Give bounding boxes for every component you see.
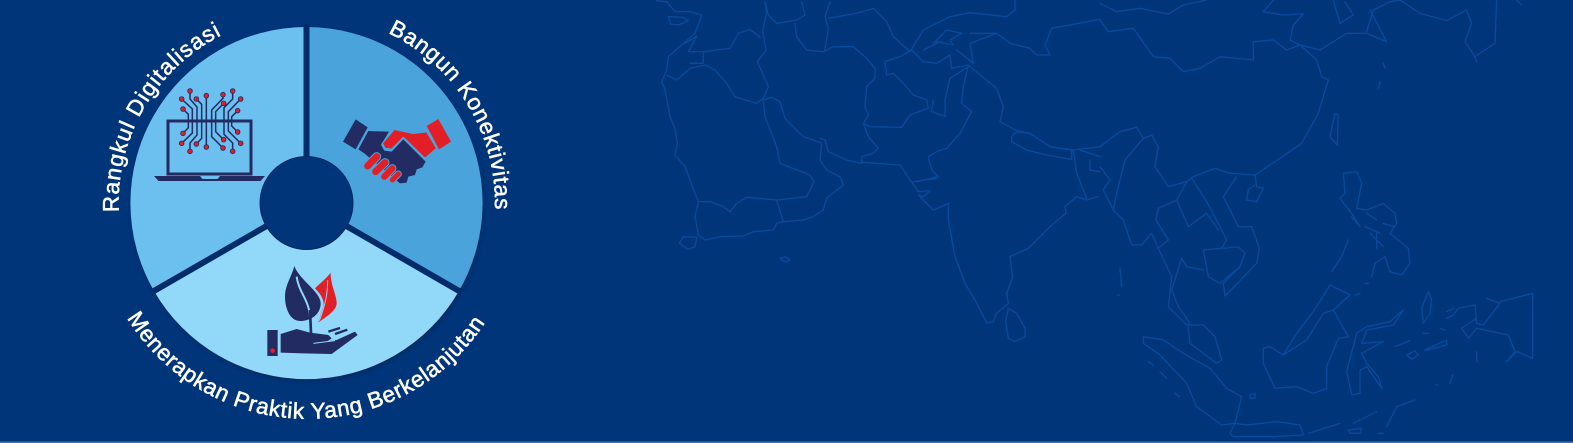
wheel base with shadow — [130, 27, 482, 379]
label: Menerapkan Praktik Yang Berkelanjutan: Menerapkan Praktik Yang Berkelanjutan — [128, 310, 485, 420]
icon: plant in hand — [267, 266, 358, 356]
circuit — [179, 89, 243, 154]
center hole — [260, 156, 353, 250]
dividers — [153, 24, 460, 292]
map outline: East and Southeast Asia — [1100, 0, 1533, 437]
laptop screen — [168, 121, 251, 174]
icon: handshake — [343, 119, 451, 183]
bottom edge line — [0, 442, 1573, 443]
pie wheel — [130, 24, 483, 379]
map outline: western Asia and South Asia — [657, 0, 1100, 342]
laptop base — [154, 176, 265, 181]
label: Rangkul Digitalisasi: Rangkul Digitalisasi — [102, 21, 221, 211]
segment: Rangkul Digitalisasi — [130, 27, 306, 291]
segment: Menerapkan Praktik Yang Berkelanjutan — [154, 203, 459, 379]
segment: Bangun Konektivitas — [306, 27, 483, 291]
label: Bangun Konektivitas: Bangun Konektivitas — [389, 20, 510, 209]
icon: laptop circuit — [154, 89, 265, 181]
